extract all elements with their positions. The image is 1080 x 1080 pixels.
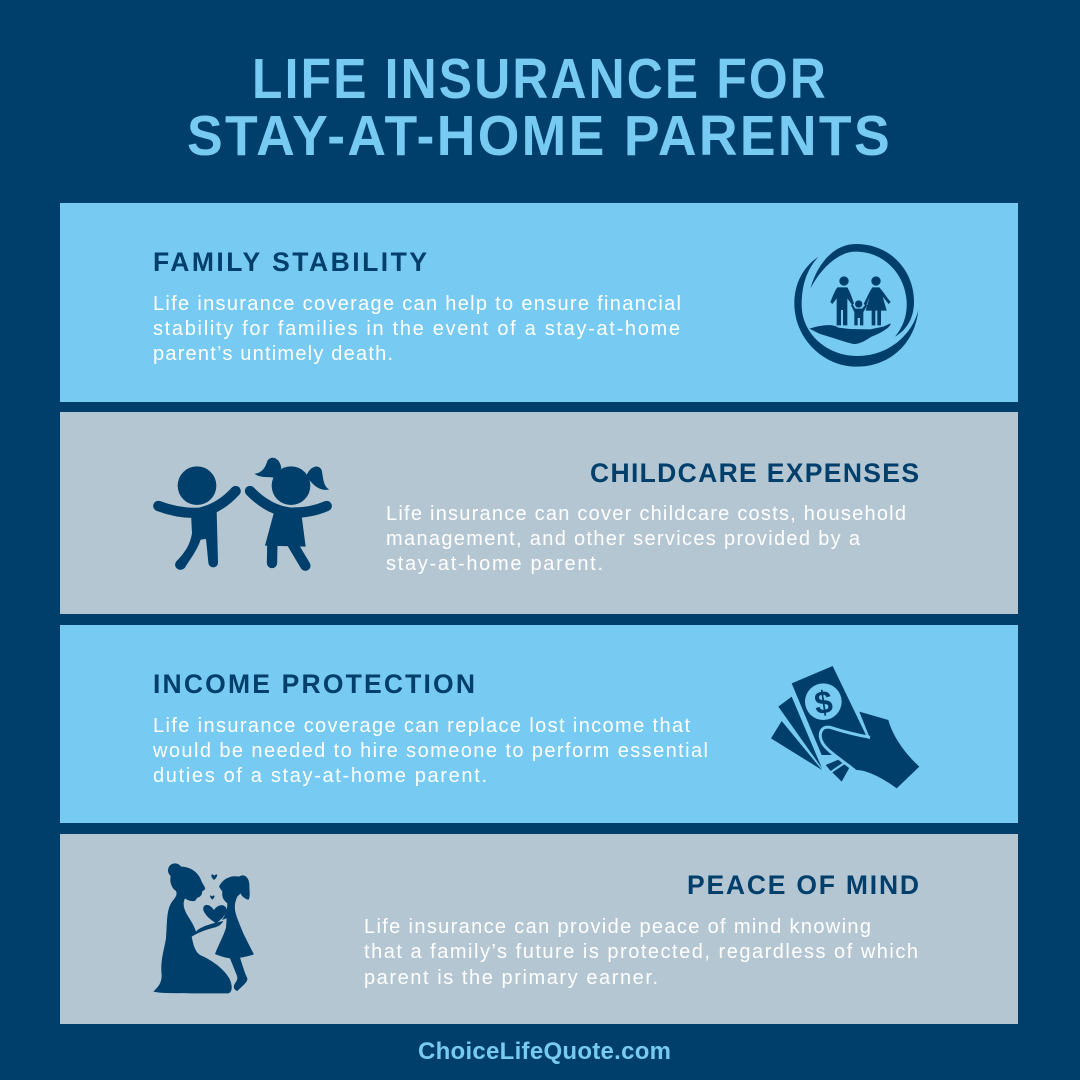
text block: childcare expenses: Life insurance can cover childcare costs, household	[386, 503, 906, 525]
panel: peace of mind	[60, 834, 1018, 1024]
text block: peace of mind	[364, 916, 918, 989]
panel: childcare expenses	[60, 412, 1018, 614]
text block: peace of mind: that a family’s future is protected, regardless of which	[364, 941, 918, 963]
heading: family stability: FAMILY STABILITY	[153, 247, 427, 277]
text block: childcare expenses: management, and other services provided by a	[386, 528, 861, 550]
text block: peace of mind: Life insurance can provide peace of mind knowing	[364, 916, 871, 938]
title: STAY-AT-HOME PARENTS	[187, 104, 892, 168]
panel: family stability	[60, 203, 1018, 402]
icon: family in a protecting hand	[794, 244, 918, 367]
text block: income protection: Life insurance coverage can replace lost income that	[153, 715, 690, 737]
text block: family stability: stability for families in the event of a stay-at-home	[153, 318, 680, 340]
text block: income protection: duties of a stay-at-home parent.	[153, 765, 487, 787]
panel: income protection	[60, 625, 1018, 823]
title: LIFE INSURANCE FOR	[252, 47, 828, 111]
text block: peace of mind: parent is the primary earner.	[364, 967, 658, 989]
heading: childcare expenses: CHILDCARE EXPENSES	[590, 458, 919, 488]
heading: peace of mind: PEACE OF MIND	[687, 870, 919, 900]
text block: income protection	[152, 715, 708, 787]
icon: mother and daughter with heart	[153, 863, 254, 993]
text block: family stability	[153, 293, 681, 365]
text block: childcare expenses: stay-at-home parent.	[386, 553, 603, 575]
text block: family stability: parent’s untimely death.	[153, 343, 393, 365]
text block: income protection: would be needed to hire someone to perform essential	[152, 740, 708, 762]
footer: website: ChoiceLifeQuote.com	[418, 1038, 671, 1065]
heading: income protection: INCOME PROTECTION	[153, 669, 475, 699]
icon: two children	[158, 458, 329, 570]
icon: hand holding cash: $	[812, 683, 835, 721]
icon: hand holding cash	[771, 666, 919, 788]
text block: family stability: Life insurance coverage can help to ensure financial	[153, 293, 681, 315]
text block: childcare expenses	[386, 503, 906, 575]
title	[187, 47, 892, 168]
